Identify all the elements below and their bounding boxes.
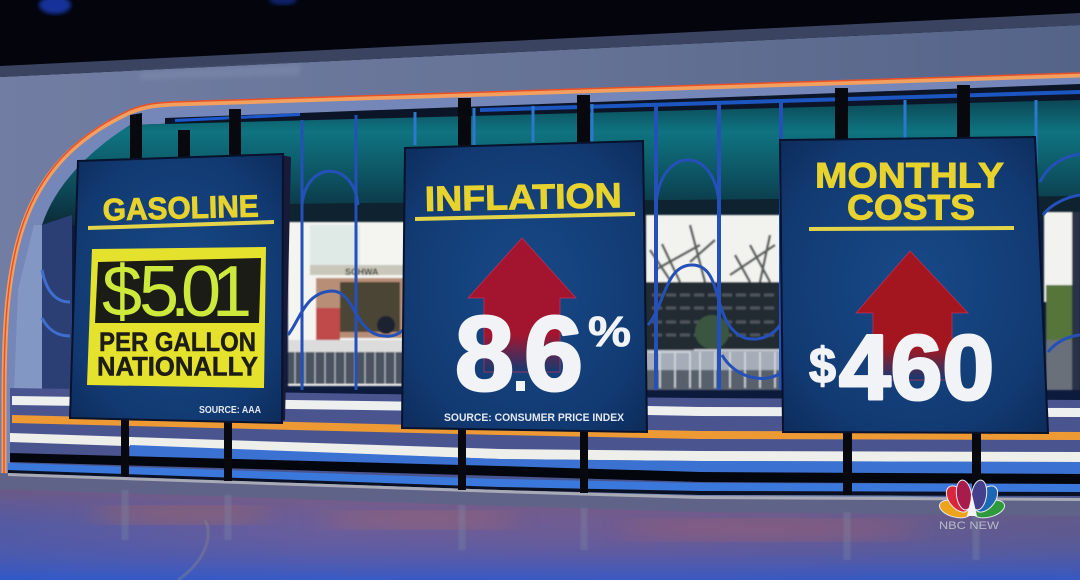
heading rule	[809, 226, 1014, 231]
heading: monthly costs: MONTHLY	[815, 156, 1004, 196]
source: AAA: SOURCE: AAA	[199, 405, 261, 416]
street view window far right	[1044, 212, 1080, 390]
figure: 8.6 percent: %	[588, 308, 631, 356]
figure: 8.6 percent: 86	[455, 295, 583, 413]
street view window centre-right	[646, 215, 782, 390]
street view window left	[288, 222, 404, 386]
panel: gasoline	[70, 154, 291, 423]
perspective colour stripes	[8, 388, 1080, 500]
NBC News wordmark: NBC NEW	[939, 520, 1000, 532]
panel: inflation	[402, 141, 647, 432]
heading: gasoline: GASOLINE	[102, 188, 259, 227]
figure: $460: 460	[839, 317, 994, 419]
heading: monthly costs: COSTS	[847, 188, 975, 228]
gas price sign	[87, 247, 266, 388]
heading rule	[415, 212, 635, 221]
price digits: $5.01	[102, 252, 252, 332]
figure: $460: $	[809, 338, 836, 394]
window area backdrop	[4, 75, 1080, 500]
up arrow	[468, 238, 576, 372]
heading: monthly costs	[815, 156, 1004, 228]
heading rule	[88, 220, 274, 230]
blue window frames and arches	[42, 100, 1080, 390]
heading: inflation: INFLATION	[424, 176, 622, 219]
support posts	[121, 85, 981, 496]
street view window left: SCHWA	[345, 267, 379, 277]
source: consumer price index: SOURCE: CONSUMER PRICE INDEX	[444, 412, 625, 424]
orange neon trim	[4, 73, 1080, 485]
panel: monthly costs	[780, 137, 1048, 433]
icon: NBC peacock logo	[937, 479, 1007, 521]
up arrow	[856, 251, 968, 380]
per gallon nationally label: NATIONALLY	[97, 352, 258, 382]
studio floor	[0, 473, 1080, 580]
per gallon nationally label	[97, 327, 258, 382]
per gallon nationally label: PER GALLON	[99, 327, 256, 357]
dark ceiling	[0, 0, 1080, 80]
